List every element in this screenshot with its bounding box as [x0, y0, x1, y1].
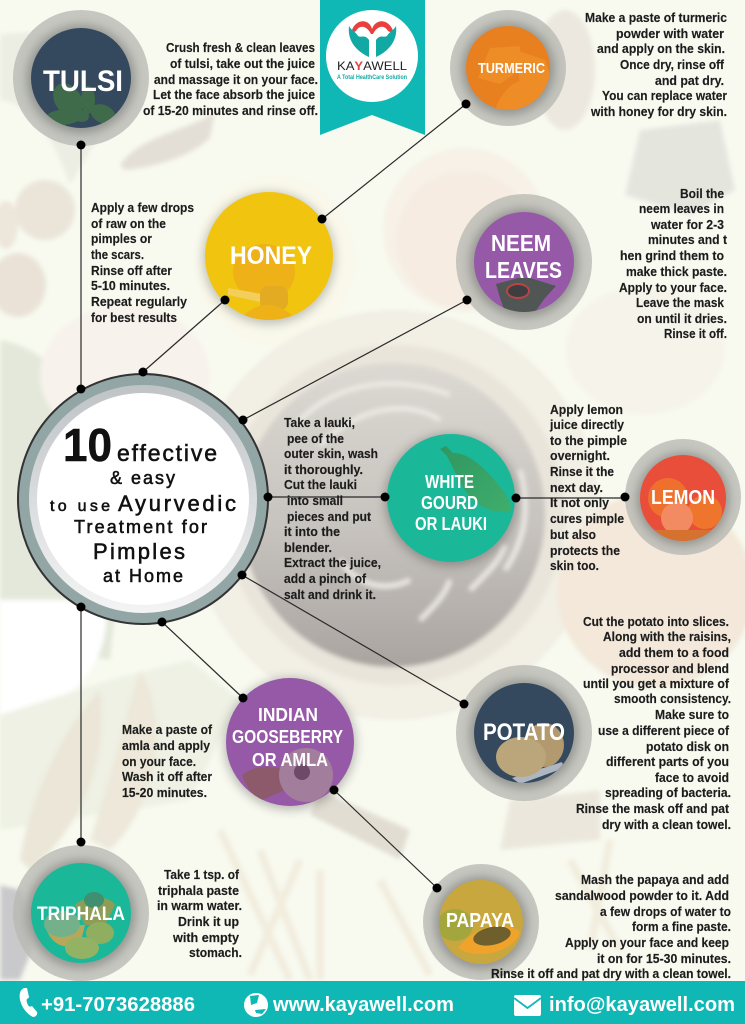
center title circle — [18, 374, 268, 624]
triphala circle — [13, 845, 149, 981]
potato description: until you get a mixture of — [583, 677, 730, 691]
title text: at Home — [103, 566, 183, 586]
label: indian gooseberry or amla: OR AMLA — [252, 750, 328, 770]
footer contact bar — [0, 981, 745, 1024]
lemon description — [549, 403, 627, 573]
potato description: Cut the potato into slices. — [583, 615, 729, 629]
label: white gourd or lauki — [415, 472, 487, 534]
logo tagline: A Total HealthCare Solution — [337, 75, 407, 81]
title text: Pimples — [93, 539, 185, 564]
triphala description — [157, 868, 242, 960]
lauki description: pee of the — [287, 432, 344, 446]
title text: Treatment for — [74, 517, 207, 537]
icon: lemons — [648, 478, 722, 545]
potato description: processor and blend — [611, 662, 729, 676]
tulsi description: of tulsi, take out the juice — [170, 57, 315, 71]
neem description — [619, 187, 728, 341]
banner with logo — [320, 0, 425, 135]
icon: turmeric roots and powder — [478, 46, 552, 112]
neem description: Leave the mask — [636, 296, 724, 310]
potato description — [576, 615, 731, 832]
lemon circle — [625, 439, 741, 555]
potato description: dry with a clean towel. — [602, 818, 731, 832]
label: indian gooseberry or amla: INDIAN — [258, 705, 318, 725]
lemon description: Rinse it the — [550, 465, 614, 479]
lauki description: it into the — [284, 525, 340, 539]
icon: tulsi leaves — [47, 84, 115, 125]
lauki description: pieces and put — [287, 510, 372, 524]
label: potato: POTATO — [483, 719, 565, 746]
icon: green gourd — [440, 446, 511, 512]
icon: amla fruit — [242, 748, 333, 802]
lemon description: It not only — [550, 496, 609, 510]
lemon description: protects the — [550, 544, 620, 558]
email: info@kayawell.com — [549, 994, 735, 1016]
turmeric description: Once dry, rinse off — [620, 58, 725, 72]
title text — [50, 419, 236, 586]
lauki description: blender. — [284, 541, 332, 555]
triphala description: in warm water. — [157, 899, 242, 913]
neem description: Boil the — [680, 187, 724, 201]
potato description: different parts of you — [606, 755, 729, 769]
icon: phone — [20, 988, 37, 1017]
papaya circle — [423, 864, 539, 980]
label: honey: HONEY — [230, 242, 312, 270]
icon: neem leaves in bowl — [496, 278, 556, 312]
potato description: add them to a food — [619, 646, 729, 660]
website: www.kayawell.com — [272, 994, 454, 1016]
honey description — [91, 201, 194, 325]
potato description: face to avoid — [655, 771, 729, 785]
label: white gourd or lauki: OR LAUKI — [415, 514, 487, 534]
honey description: 5-10 minutes. — [91, 279, 170, 293]
label: neem leaves: NEEM — [491, 230, 551, 256]
phone number: +91-7073628886 — [41, 994, 195, 1016]
icon: potatoes — [496, 723, 564, 784]
triphala description: stomach. — [189, 946, 242, 960]
triphala description: with empty — [172, 931, 239, 945]
lemon description: overnight. — [550, 449, 610, 463]
icon: envelope — [514, 995, 541, 1016]
label: lemon: LEMON — [651, 487, 715, 509]
potato circle — [456, 665, 592, 801]
neem description: on until it dries. — [637, 312, 727, 326]
papaya description: it on for 15-30 minutes. — [597, 952, 731, 966]
honey description: of raw on the — [91, 217, 166, 231]
tulsi description: of 15-20 minutes and rinse off. — [143, 104, 318, 118]
tulsi description: Let the face absorb the juice — [153, 88, 315, 102]
lauki description: salt and drink it. — [284, 588, 376, 602]
lauki description: outer skin, wash — [284, 447, 378, 461]
papaya description: sandalwood powder to it. Add — [555, 889, 729, 903]
neem description: make thick paste. — [626, 265, 727, 279]
triphala description: Drink it up — [178, 915, 239, 929]
lauki description: into small — [287, 494, 343, 508]
label: neem leaves: LEAVES — [485, 257, 562, 283]
logo heart — [351, 21, 394, 34]
lemon description: next day. — [550, 481, 603, 495]
lauki description: Cut the lauki — [284, 478, 357, 492]
amla description: 15-20 minutes. — [122, 786, 207, 800]
icon: globe — [244, 993, 268, 1017]
label: turmeric: TURMERIC — [478, 60, 545, 77]
turmeric description — [585, 11, 727, 119]
lemon description: to the pimple — [550, 434, 627, 448]
papaya description: form a fine paste. — [632, 920, 731, 934]
honey description: the scars. — [91, 248, 144, 262]
label: white gourd or lauki: WHITE — [425, 472, 474, 492]
turmeric description: and apply on the skin. — [597, 42, 725, 56]
lemon description: skin too. — [550, 559, 599, 573]
honey description: Repeat regularly — [91, 295, 187, 309]
amla description: Make a paste of — [122, 723, 213, 737]
triphala description: Take 1 tsp. of — [164, 868, 240, 882]
tulsi circle — [13, 10, 149, 146]
icon: triphala fruits in bowls — [44, 892, 115, 959]
papaya description: Mash the papaya and add — [581, 873, 729, 887]
lemon description: but also — [550, 528, 596, 542]
connector dots — [76, 100, 630, 892]
label: papaya: PAPAYA — [446, 910, 514, 932]
neem description: water for 2-3 — [650, 218, 724, 232]
turmeric description: You can replace water — [602, 89, 727, 103]
logo hands — [349, 26, 396, 57]
tulsi description — [143, 41, 318, 118]
lemon description: Apply lemon — [550, 403, 623, 417]
neem leaves circle — [456, 194, 592, 330]
tulsi description: Crush fresh & clean leaves — [166, 41, 315, 55]
papaya description: Apply on your face and keep — [565, 936, 729, 950]
title text: 10 — [63, 419, 112, 471]
neem description: minutes and t — [648, 233, 728, 247]
papaya description: a few drops of water to — [600, 905, 731, 919]
lauki description: it thoroughly. — [284, 463, 363, 477]
turmeric description: powder with water — [616, 27, 724, 41]
label: white gourd or lauki: GOURD — [421, 493, 478, 513]
turmeric description: with honey for dry skin. — [590, 105, 727, 119]
neem description: neem leaves in — [639, 202, 724, 216]
lauki description: Extract the juice, — [284, 556, 381, 570]
turmeric circle — [450, 10, 566, 126]
connector lines — [81, 104, 625, 888]
potato description: spreading of bacteria. — [605, 786, 731, 800]
potato description: use a different piece of — [598, 724, 730, 738]
label: triphala: TRIPHALA — [37, 904, 125, 925]
lemon description: cures pimple — [550, 512, 624, 526]
potato description: smooth consistency. — [614, 692, 731, 706]
title text: & easy — [110, 468, 175, 488]
honey description: for best results — [91, 311, 177, 325]
amla description — [122, 723, 213, 800]
amla description: amla and apply — [122, 739, 210, 753]
title text: Ayurvedic — [118, 491, 236, 516]
turmeric description: and pat dry. — [655, 74, 724, 88]
label: indian gooseberry or amla: GOOSEBERRY — [232, 727, 343, 747]
amla description: Wash it off after — [122, 770, 212, 784]
honey description: Rinse off after — [91, 264, 172, 278]
honey description: pimples or — [91, 232, 152, 246]
potato description: potato disk on — [646, 740, 729, 754]
lauki description: add a pinch of — [284, 572, 367, 586]
logo wordmark: KAYAWELL — [337, 61, 408, 73]
white gourd circle — [385, 434, 517, 566]
amla description: on your face. — [122, 755, 196, 769]
potato description: Rinse the mask off and pat — [576, 802, 730, 816]
potato description: Make sure to — [655, 708, 729, 722]
tulsi description: and massage it on your face. — [154, 73, 318, 87]
label: neem leaves — [485, 230, 562, 283]
indian gooseberry circle — [224, 678, 356, 810]
potato description: Along with the raisins, — [603, 630, 731, 644]
neem description: Apply to your face. — [619, 281, 727, 295]
honey circle — [203, 192, 335, 324]
lauki description: Take a lauki, — [284, 416, 355, 430]
honey description: Apply a few drops — [91, 201, 194, 215]
lemon description: juice directly — [549, 418, 624, 432]
turmeric description: Make a paste of turmeric — [585, 11, 727, 25]
lauki description — [284, 416, 381, 602]
papaya description: Rinse it off and pat dry with a clean towel. — [491, 967, 731, 981]
triphala description: triphala paste — [158, 884, 239, 898]
icon: honey pot and dipper — [228, 244, 296, 320]
label: tulsi: TULSI — [43, 65, 123, 98]
label: indian gooseberry or amla — [232, 705, 343, 770]
neem description: hen grind them to — [620, 249, 724, 263]
neem description: Rinse it off. — [664, 327, 727, 341]
papaya description — [491, 873, 731, 981]
title text: to use — [50, 498, 110, 515]
title text: effective — [117, 440, 217, 466]
icon: papaya half — [437, 909, 520, 954]
